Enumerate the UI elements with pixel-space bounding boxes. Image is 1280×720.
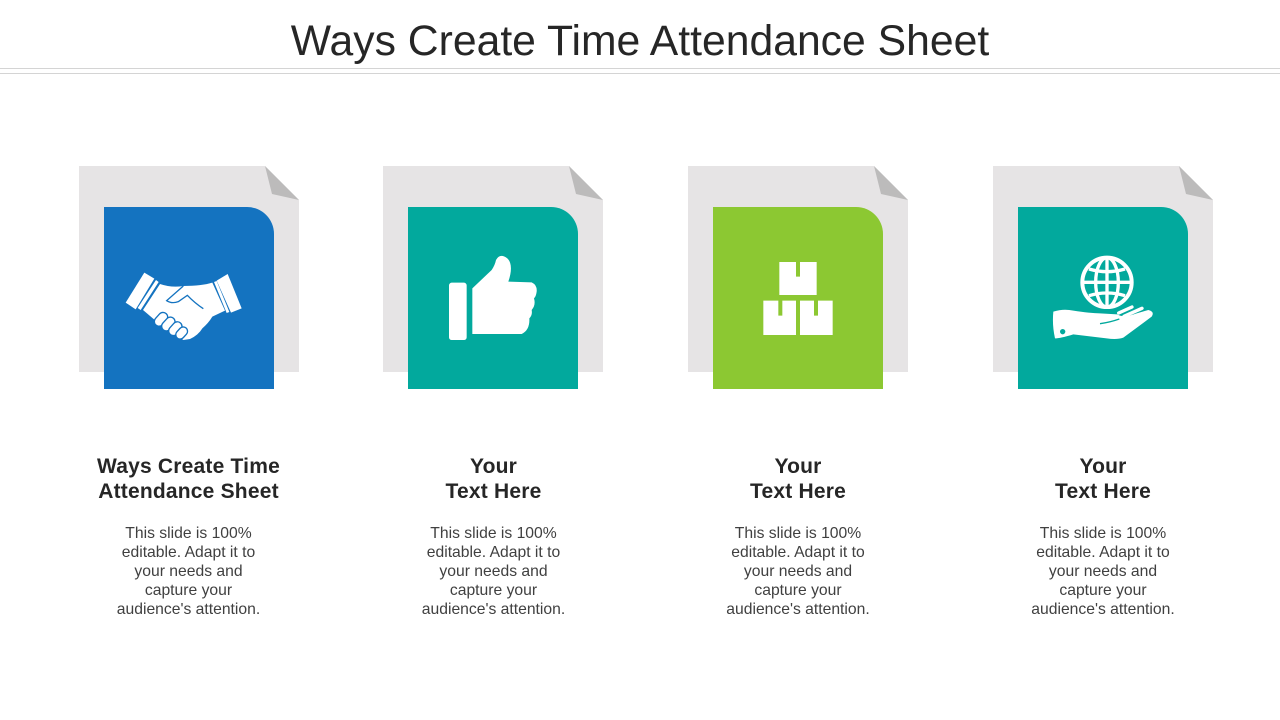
text: column 4: This slide is 100%	[1040, 525, 1166, 542]
panel: boxes card	[688, 166, 908, 389]
text: column 1: This slide is 100%	[125, 525, 252, 542]
text: column 1: your needs and	[134, 563, 243, 580]
text: column 4: Your	[1079, 455, 1127, 478]
text: column 2: This slide is 100%	[430, 525, 557, 542]
text: column 2: Text Here	[446, 480, 541, 503]
text: column 2: your needs and	[439, 563, 548, 580]
text: column 1: editable. Adapt it to	[122, 544, 255, 561]
blue square	[104, 207, 274, 389]
text: column 1: audience's attention.	[117, 601, 260, 618]
folded paper background	[79, 166, 299, 372]
text: column 1: Attendance Sheet	[98, 480, 279, 503]
panel: thumbs up card	[383, 166, 603, 389]
teal square	[1018, 207, 1188, 389]
text: column 2: capture your	[450, 582, 537, 599]
text: column 4: editable. Adapt it to	[1036, 544, 1170, 561]
text: column 1: Ways Create Time	[97, 455, 280, 478]
green square	[713, 207, 883, 389]
text: column 3	[726, 455, 870, 618]
icon: thumbs up	[449, 256, 537, 340]
text: column 4	[1031, 455, 1175, 618]
text: column 3: editable. Adapt it to	[731, 544, 865, 561]
text: column 4: Text Here	[1055, 480, 1151, 503]
text: column 3: capture your	[754, 582, 842, 599]
text: column 2: editable. Adapt it to	[427, 544, 560, 561]
text: column 2	[422, 455, 565, 618]
text: column 3: Text Here	[750, 480, 846, 503]
folded paper background	[688, 166, 908, 372]
text: column 4: audience's attention.	[1031, 601, 1175, 618]
text: column 1	[97, 455, 280, 618]
icon: stacked boxes	[763, 262, 833, 335]
text: column 3: This slide is 100%	[735, 525, 861, 542]
folded paper background	[993, 166, 1213, 372]
text: column 2: Your	[470, 455, 517, 478]
text: column 3: Your	[774, 455, 822, 478]
text: column 4: your needs and	[1049, 563, 1157, 580]
text: column 2: audience's attention.	[422, 601, 565, 618]
icon: handshake	[126, 272, 242, 340]
teal square	[408, 207, 578, 389]
text: column 1: capture your	[145, 582, 232, 599]
panel: handshake card	[79, 166, 299, 389]
text: column 3: audience's attention.	[726, 601, 870, 618]
folded paper background	[383, 166, 603, 372]
panel: globe in hand card	[993, 166, 1213, 389]
text: column 4: capture your	[1059, 582, 1147, 599]
icon: globe on open hand	[1052, 256, 1153, 339]
title: Ways Create Time Attendance Sheet	[291, 17, 989, 65]
text: column 3: your needs and	[744, 563, 852, 580]
